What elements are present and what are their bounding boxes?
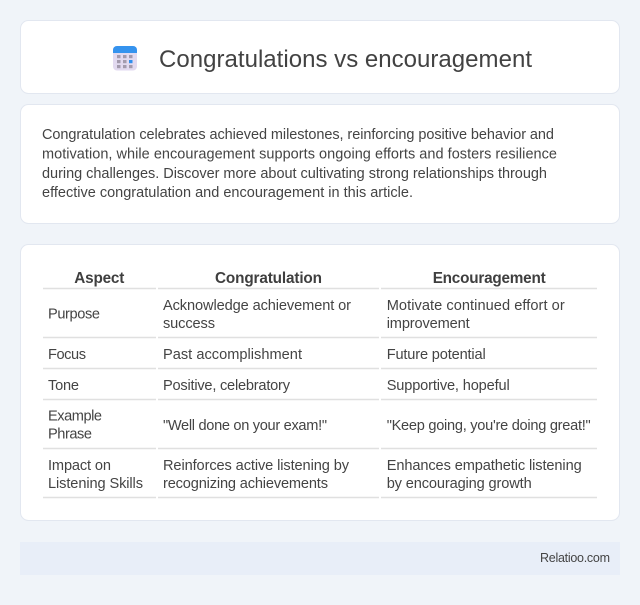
row: example phrase: Phrase bbox=[48, 426, 92, 442]
text block: introduction: motivation, while encouragement supports ongoing efforts and fosters resilience bbox=[42, 146, 557, 162]
row: impact on listening skills: Reinforces active listening by bbox=[163, 458, 350, 474]
row: focus bbox=[48, 347, 486, 363]
row: impact on listening skills: by encouraging growth bbox=[387, 476, 532, 492]
row: purpose: improvement bbox=[387, 316, 470, 332]
table rules bbox=[43, 288, 597, 498]
table header: Encouragement bbox=[433, 270, 546, 287]
row: example phrase bbox=[48, 408, 591, 442]
footer bbox=[20, 542, 620, 575]
row: focus: Focus bbox=[48, 347, 86, 363]
row: impact on listening skills: Listening Skills bbox=[48, 476, 143, 492]
row: focus: Future potential bbox=[387, 347, 486, 363]
text block: introduction: during challenges. Discover more about cultivating strong relationships through bbox=[42, 166, 547, 182]
panel: title card bbox=[20, 20, 620, 94]
row: impact on listening skills bbox=[48, 458, 582, 492]
row: purpose: success bbox=[163, 316, 215, 332]
footer credit: Relatioo.com bbox=[540, 551, 610, 565]
row: impact on listening skills: Impact on bbox=[48, 458, 111, 474]
table header: Congratulation bbox=[215, 270, 322, 287]
table header: Aspect bbox=[74, 270, 124, 287]
icon: calendar bbox=[113, 46, 137, 70]
row: purpose: Motivate continued effort or bbox=[387, 298, 565, 314]
row: example phrase: "Keep going, you're doing great!" bbox=[387, 418, 591, 434]
row: focus: Past accomplishment bbox=[163, 347, 302, 363]
row: example phrase: "Well done on your exam!" bbox=[163, 418, 327, 434]
row: example phrase: Example bbox=[48, 408, 102, 424]
row: impact on listening skills: recognizing achievements bbox=[163, 476, 328, 492]
panel: comparison table bbox=[20, 244, 620, 520]
row: tone: Tone bbox=[48, 378, 79, 394]
row: purpose: Acknowledge achievement or bbox=[163, 298, 351, 314]
row: purpose bbox=[48, 298, 565, 332]
row: tone: Positive, celebratory bbox=[163, 378, 291, 394]
row: tone bbox=[48, 378, 510, 394]
table header bbox=[74, 270, 546, 287]
text block: introduction: effective congratulation and encouragement in this article. bbox=[42, 185, 413, 201]
row: tone: Supportive, hopeful bbox=[387, 378, 510, 394]
panel: introduction bbox=[20, 104, 620, 224]
row: impact on listening skills: Enhances empathetic listening bbox=[387, 458, 582, 474]
text block: introduction bbox=[42, 127, 557, 201]
row: purpose: Purpose bbox=[48, 306, 100, 322]
title: Congratulations vs encouragement bbox=[159, 46, 532, 73]
text block: introduction: Congratulation celebrates achieved milestones, reinforcing positive behavior and bbox=[42, 127, 554, 143]
